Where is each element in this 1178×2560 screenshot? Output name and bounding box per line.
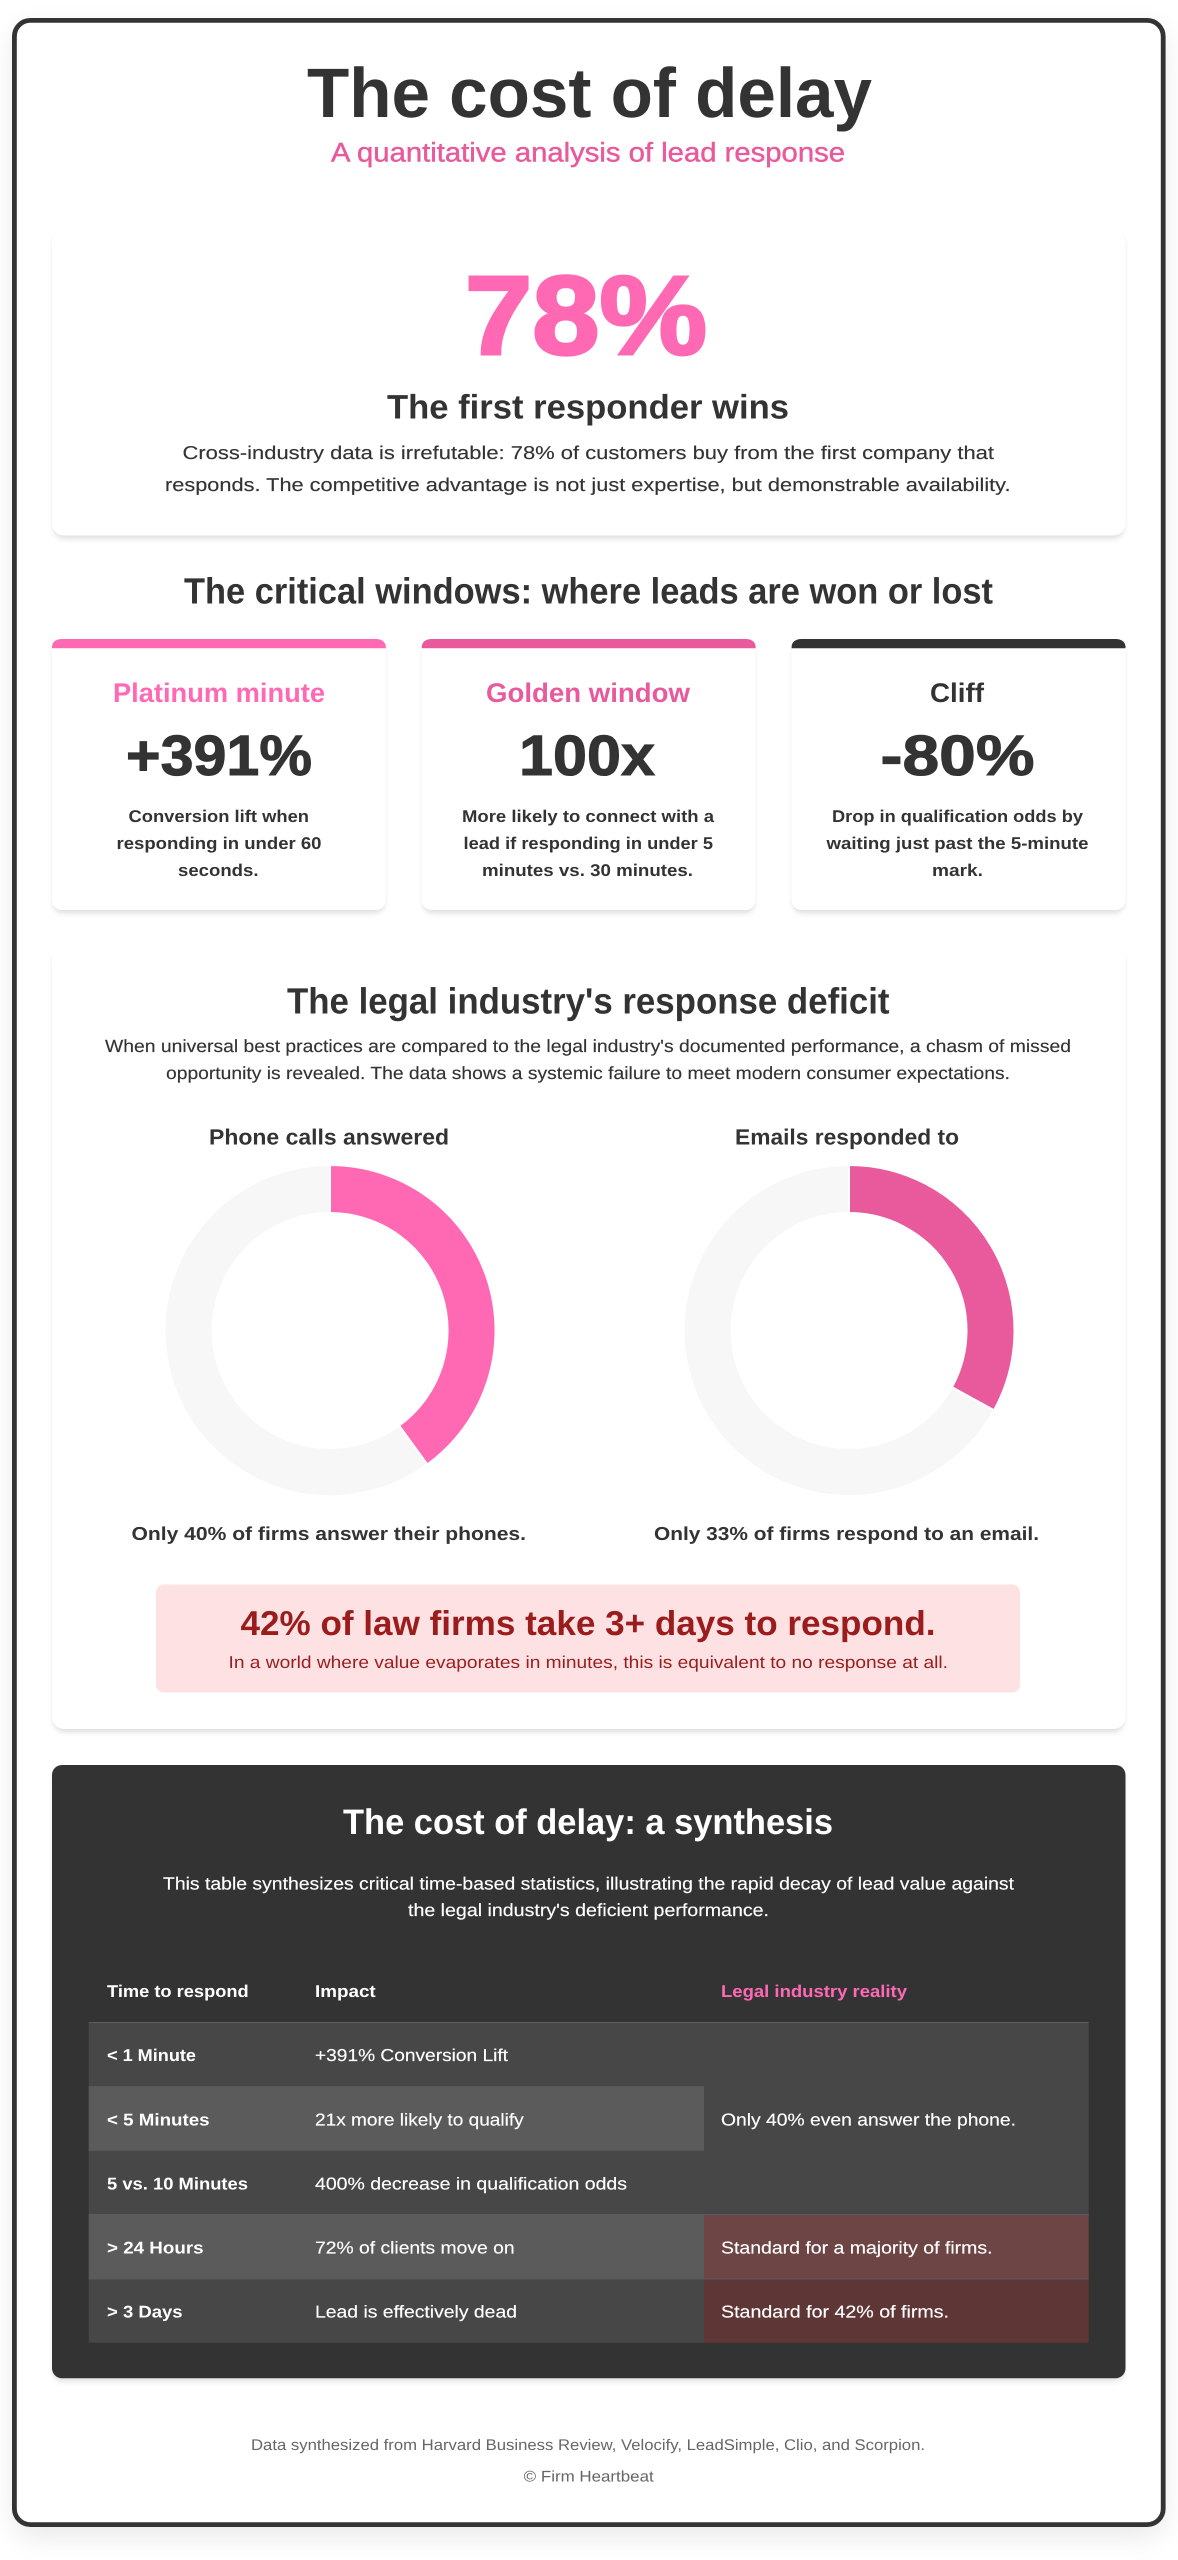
section heading: The legal industry's response deficit — [287, 981, 890, 1022]
table header — [107, 1982, 908, 2001]
row: over 3 days — [107, 2302, 949, 2322]
footer — [251, 2437, 925, 2486]
card description: More likely to connect with a — [462, 807, 715, 826]
card description: seconds. — [178, 861, 258, 880]
row: over 3 days: > 3 Days — [107, 2302, 183, 2322]
row: over 24 hours: 72% of clients move on — [315, 2238, 515, 2258]
row: under 1 minute: +391% Conversion Lift — [315, 2045, 508, 2065]
section text: When universal best practices are compared to the legal industry's documented performance, a chasm of missed — [105, 1036, 1071, 1056]
row: 5 vs 10 minutes: 400% decrease in qualification odds — [315, 2174, 627, 2194]
card description: Conversion lift when — [128, 807, 309, 826]
panel: first responder hero — [52, 229, 1126, 540]
panel: platinum minute — [52, 639, 386, 914]
row: under 1 minute — [107, 2045, 508, 2065]
card description: waiting just past the 5-minute — [825, 834, 1088, 853]
heading: critical windows: The critical windows: where leads are won or lost — [184, 571, 993, 612]
card value: +391% — [126, 724, 312, 788]
hero text: Cross-industry data is irrefutable: 78% of customers buy from the first company that — [182, 442, 995, 463]
callout: In a world where value evaporates in minutes, this is equivalent to no response at all. — [228, 1652, 948, 1672]
chart: emails responded to — [654, 1124, 1039, 1544]
table header: Legal industry reality — [721, 1982, 908, 2001]
chart: emails responded to: Emails responded to — [735, 1124, 959, 1150]
row: under 5 minutes — [107, 2109, 1016, 2129]
row: over 3 days: Standard for 42% of firms. — [721, 2302, 949, 2322]
section text: This table synthesizes critical time-based statistics, illustrating the rapid decay of lead value against — [163, 1874, 1014, 1894]
section text — [105, 1036, 1071, 1083]
row: under 1 minute: < 1 Minute — [107, 2046, 196, 2065]
row: over 24 hours — [107, 2238, 992, 2258]
panel: cliff — [792, 639, 1126, 914]
chart: emails responded to: Only 33% of firms respond to an email. — [654, 1523, 1039, 1544]
card description — [116, 807, 322, 880]
row: over 3 days: Lead is effectively dead — [315, 2302, 517, 2322]
callout: 42% of law firms take 3+ days to respond. — [240, 1605, 936, 1643]
row: under 5 minutes: 21x more likely to qualify — [315, 2109, 524, 2129]
footer: Data synthesized from Harvard Business Review, Velocify, LeadSimple, Clio, and Scorpion. — [251, 2437, 925, 2454]
row: over 24 hours: > 24 Hours — [107, 2238, 204, 2258]
card description: responding in under 60 — [116, 834, 322, 853]
row: over 24 hours: Standard for a majority of firms. — [721, 2238, 992, 2258]
big stat 78%: 78% — [465, 253, 707, 378]
hero text — [165, 442, 1010, 495]
card description: mark. — [932, 861, 983, 880]
card label: Platinum minute — [113, 678, 325, 708]
hero heading: The first responder wins — [387, 389, 789, 427]
callout — [156, 1584, 1020, 1692]
card description: Drop in qualification odds by — [832, 807, 1084, 826]
panel: golden window — [422, 639, 756, 914]
card label: Golden window — [486, 678, 691, 708]
card description: minutes vs. 30 minutes. — [482, 861, 693, 880]
table header: Impact — [315, 1982, 376, 2001]
section text — [163, 1874, 1014, 1920]
card value: -80% — [880, 724, 1034, 788]
row: 5 vs 10 minutes — [107, 2174, 627, 2194]
table — [89, 1982, 1089, 2343]
row: under 5 minutes: Only 40% even answer the phone. — [721, 2109, 1016, 2129]
chart: phone calls answered: Only 40% of firms answer their phones. — [132, 1523, 526, 1544]
panel: synthesis — [52, 1765, 1126, 2382]
chart: phone calls answered: Phone calls answered — [209, 1124, 449, 1150]
card description: lead if responding in under 5 — [464, 834, 713, 853]
section text: the legal industry's deficient performance. — [408, 1900, 769, 1920]
section text: opportunity is revealed. The data shows a systemic failure to meet modern consumer expectations. — [166, 1063, 1010, 1083]
section heading: The cost of delay: a synthesis — [343, 1802, 833, 1842]
subtitle: A quantitative analysis of lead response — [331, 138, 845, 168]
table rows background — [89, 2022, 1089, 2343]
table header: Time to respond — [107, 1982, 249, 2001]
row: 5 vs 10 minutes: 5 vs. 10 Minutes — [107, 2174, 248, 2194]
header — [307, 54, 872, 168]
card value: 100x — [519, 724, 655, 788]
hero text: responds. The competitive advantage is not just expertise, but demonstrable availability. — [165, 474, 1010, 495]
panel: legal industry response deficit — [52, 946, 1126, 1733]
row: under 5 minutes: < 5 Minutes — [107, 2110, 210, 2129]
card description — [462, 807, 715, 880]
title: The cost of delay — [307, 54, 872, 132]
card description — [825, 807, 1088, 880]
footer: © Firm Heartbeat — [524, 2468, 654, 2486]
chart: phone calls answered — [132, 1124, 526, 1544]
card label: Cliff — [930, 678, 985, 708]
